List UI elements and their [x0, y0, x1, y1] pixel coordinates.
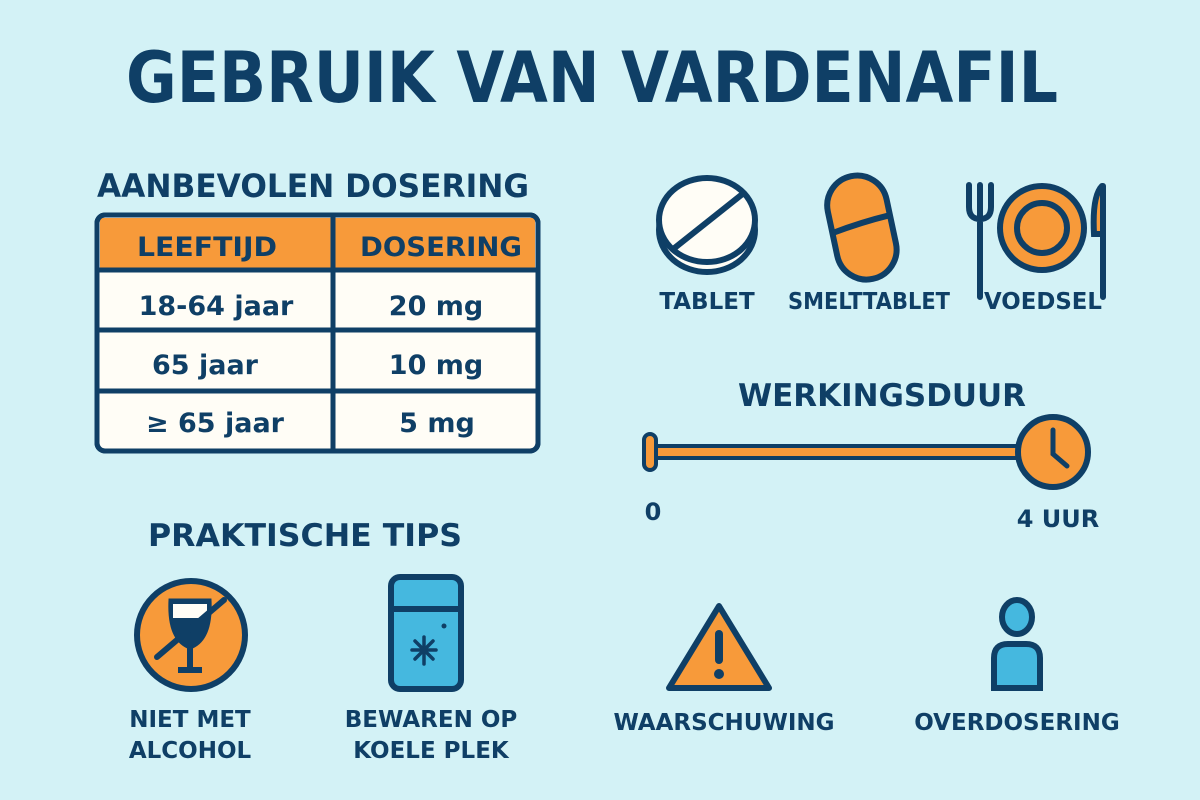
- labels: warnings: WAARSCHUWING: [613, 710, 835, 736]
- labels: intake forms: VOEDSEL: [984, 289, 1102, 315]
- labels: intake forms: [659, 289, 1102, 315]
- icon: warning triangle: [669, 606, 769, 688]
- labels: tips: NIET MET: [129, 707, 251, 733]
- dosage table: LEEFTIJD: [137, 232, 277, 263]
- dosage table: DOSERING: [360, 232, 522, 263]
- dosage table: 18-64 jaar: [139, 291, 294, 322]
- labels: warnings: [613, 710, 1120, 736]
- timeline 0 to 4 uur: 4 UUR: [1017, 505, 1099, 533]
- icon: tablet: [659, 178, 755, 272]
- title: GEBRUIK VAN VARDENAFIL: [126, 37, 1058, 119]
- icon: no alcohol: [137, 581, 245, 689]
- icon: fridge: [391, 577, 461, 689]
- labels: intake forms: SMELTTABLET: [788, 289, 950, 315]
- labels: tips: KOELE PLEK: [353, 738, 510, 764]
- labels: warnings: OVERDOSERING: [914, 710, 1120, 736]
- labels: tips: [129, 707, 517, 764]
- dosage table: 20 mg: [389, 291, 483, 322]
- labels: tips: BEWAREN OP: [345, 707, 517, 733]
- labels: intake forms: TABLET: [659, 289, 755, 315]
- timeline 0 to 4 uur: [644, 417, 1099, 533]
- dosage table: [97, 215, 538, 451]
- icon: person: [994, 600, 1040, 688]
- icon: smelttablet capsule: [822, 170, 902, 285]
- heading: aanbevolen dosering: AANBEVOLEN DOSERING: [97, 167, 529, 205]
- labels: tips: ALCOHOL: [129, 738, 252, 764]
- heading: praktische tips: PRAKTISCHE TIPS: [148, 518, 462, 554]
- timeline 0 to 4 uur: 0: [645, 498, 661, 526]
- heading: werkingsduur: WERKINGSDUUR: [738, 378, 1026, 414]
- dosage table: ≥ 65 jaar: [146, 408, 285, 439]
- dosage table: 65 jaar: [152, 350, 259, 381]
- dosage table: 10 mg: [389, 350, 483, 381]
- icon: voedsel plate with cutlery: [969, 185, 1103, 297]
- dosage table: 5 mg: [399, 408, 475, 439]
